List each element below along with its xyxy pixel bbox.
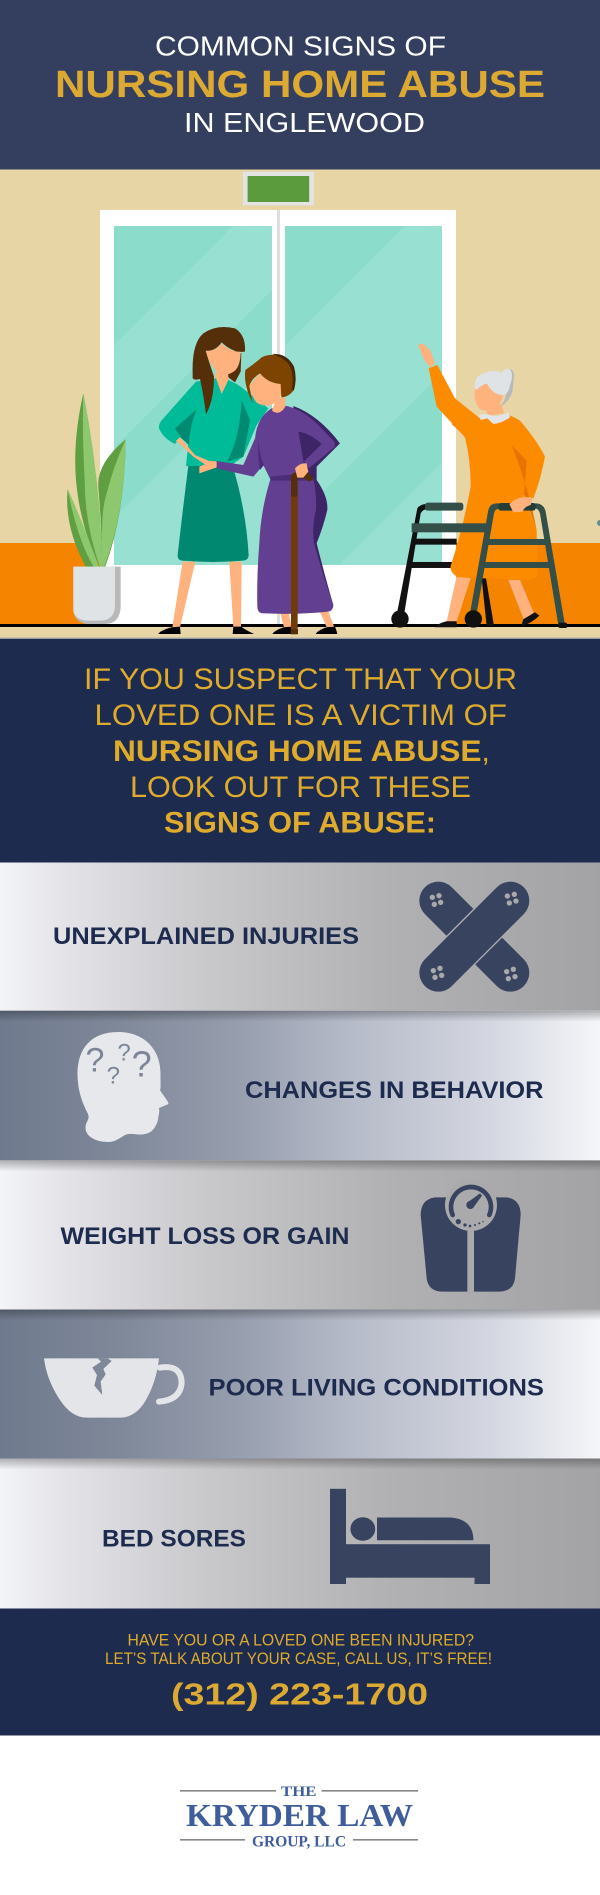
panel: bed sores bbox=[0, 1458, 600, 1608]
logo: the kryder law group bbox=[180, 1784, 418, 1850]
title line: in englewood: IN ENGLEWOOD bbox=[184, 107, 425, 138]
figure: nurse in teal bbox=[158, 327, 268, 634]
label: weight loss or gain: WEIGHT LOSS OR GAIN bbox=[60, 1223, 350, 1250]
header panel bbox=[0, 0, 600, 170]
label: unexplained injuries: UNEXPLAINED INJURIES bbox=[53, 923, 359, 950]
comma: , bbox=[482, 735, 490, 768]
icon: head with question marks: ? bbox=[132, 1044, 152, 1085]
logo: the kryder law group: GROUP, LLC bbox=[252, 1833, 346, 1850]
exit sign bbox=[243, 172, 314, 205]
call to action line 1: HAVE YOU OR A LOVED ONE BEEN INJURED? bbox=[128, 1632, 474, 1650]
panel: changes in behavior bbox=[0, 1011, 600, 1160]
label: bed sores: BED SORES bbox=[102, 1526, 246, 1553]
potted plant bbox=[67, 393, 126, 624]
panel: poor living conditions bbox=[0, 1310, 600, 1458]
icon: person in bed bbox=[330, 1489, 490, 1584]
icon: head with question marks: ? bbox=[86, 1042, 104, 1080]
title line: common signs of: COMMON SIGNS OF bbox=[155, 31, 446, 62]
panel: unexplained injuries bbox=[0, 862, 600, 1011]
icon: weighing scale bbox=[421, 1179, 521, 1293]
figure: elderly woman in purple with cane bbox=[217, 354, 340, 634]
call to action line 2: LET’S TALK ABOUT YOUR CASE, CALL US, IT’S FREE! bbox=[105, 1650, 492, 1668]
intro line 1: IF YOU SUSPECT THAT YOUR bbox=[84, 663, 517, 696]
icon: head with question marks: ? bbox=[117, 1040, 131, 1067]
icon: cracked cup bbox=[44, 1358, 182, 1418]
logo: the kryder law group: KRYDER LAW bbox=[186, 1797, 413, 1833]
figure: elderly woman in orange with walker bbox=[391, 343, 567, 628]
floor bbox=[0, 624, 600, 639]
label: changes in behavior: CHANGES IN BEHAVIOR bbox=[245, 1077, 544, 1104]
title line: nursing home abuse: NURSING HOME ABUSE bbox=[55, 64, 545, 106]
sliding glass doors bbox=[100, 210, 456, 624]
intro line 5: SIGNS OF ABUSE: bbox=[164, 807, 436, 840]
intro line 4: LOOK OUT FOR THESE bbox=[130, 771, 471, 804]
logo: the kryder law group: THE bbox=[281, 1784, 316, 1800]
panel: weight loss or gain bbox=[0, 1160, 600, 1310]
intro line 2: LOVED ONE IS A VICTIM OF bbox=[94, 699, 507, 732]
illustration: nursing home entrance scene bbox=[0, 170, 600, 640]
intro panel bbox=[0, 639, 600, 862]
icon: head with question marks bbox=[77, 1032, 168, 1142]
icon: crossed bandages bbox=[430, 892, 519, 981]
label: poor living conditions: POOR LIVING CONDITIONS bbox=[208, 1374, 544, 1402]
icon: head with question marks: ? bbox=[107, 1062, 120, 1089]
phone number: (312) 223-1700 bbox=[171, 1676, 428, 1711]
call to action panel bbox=[0, 1608, 600, 1736]
intro line 3: NURSING HOME ABUSE bbox=[113, 735, 482, 768]
